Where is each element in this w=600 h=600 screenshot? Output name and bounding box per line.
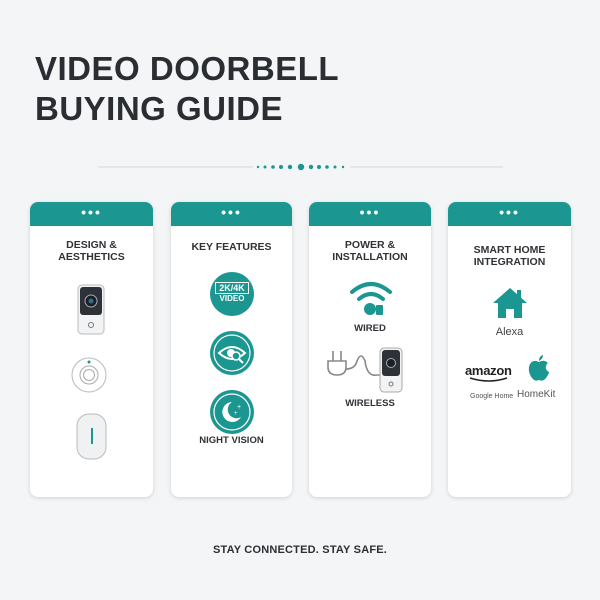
divider with dots [98, 164, 503, 170]
panel: power & installation: ••• [360, 204, 380, 220]
heading: DESIGN & [66, 239, 117, 251]
panel: smart home integration: ••• [499, 204, 520, 220]
heading [58, 239, 125, 263]
title: VIDEO DOORBELL [35, 50, 339, 87]
panel: key features: ••• [221, 204, 242, 220]
title: BUYING GUIDE [35, 90, 283, 127]
heading [474, 244, 545, 268]
heading [332, 239, 408, 263]
icon: slim doorbell [76, 414, 106, 460]
title [35, 50, 339, 127]
panel: power & installation [309, 202, 431, 497]
icon: night vision: + [234, 411, 238, 417]
icon: 2k/4k video: VIDEO [220, 294, 244, 303]
panel: key features [171, 202, 292, 497]
icon: apple [528, 355, 549, 381]
label: wireless: WIRELESS [345, 398, 395, 409]
logo: amazon: amazon [465, 363, 512, 378]
label: homekit: HomeKit [517, 389, 555, 400]
panel: design & aesthetics [30, 202, 153, 497]
heading: SMART HOME [474, 244, 545, 256]
label: wired: WIRED [354, 323, 386, 334]
footer tagline: STAY CONNECTED. STAY SAFE. [213, 544, 387, 556]
panel: smart home integration [448, 202, 571, 497]
icon: round doorbell [72, 358, 106, 392]
heading: INSTALLATION [332, 251, 408, 263]
icon: night vision [210, 390, 254, 434]
label: night vision: NIGHT VISION [199, 435, 264, 446]
icon: night vision: + [237, 404, 241, 411]
heading: POWER & [345, 239, 395, 251]
heading: KEY FEATURES [191, 241, 272, 253]
icon: wifi [350, 282, 392, 315]
icon: 2k/4k video [210, 272, 254, 316]
icon: 2k/4k video: 2K/4K [219, 283, 245, 293]
label: google home: Google Home [470, 393, 513, 400]
icon: video doorbell [78, 284, 104, 334]
heading: AESTHETICS [58, 251, 125, 263]
icon: house [493, 288, 527, 318]
icon: eye search [210, 331, 254, 375]
panel: design & aesthetics: ••• [81, 204, 102, 220]
heading: INTEGRATION [474, 256, 545, 268]
icon: plug and doorbell [327, 348, 402, 392]
label: alexa: Alexa [496, 326, 523, 338]
